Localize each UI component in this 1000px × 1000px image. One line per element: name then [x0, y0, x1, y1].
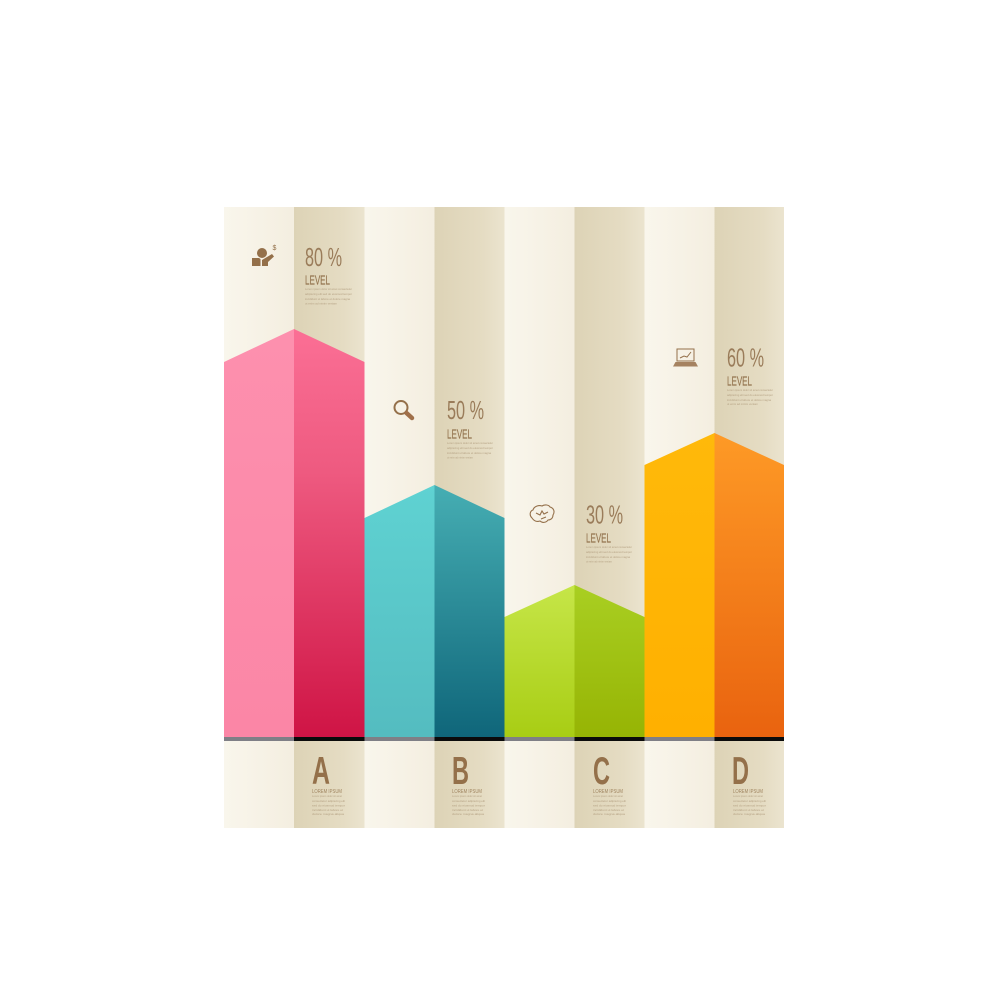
- label: 80% level: ut enim ad minim veniam: [305, 302, 338, 306]
- label: 60% level: adipiscing elit sed do eiusmod tempor: [727, 393, 773, 397]
- label: 50% level: Lorem ipsum dolor sit amet consectetur: [447, 441, 493, 445]
- caption C: dolore magna aliqua: [593, 812, 626, 816]
- caption A: LOREM IPSUM: [312, 789, 342, 795]
- caption B: [452, 750, 485, 816]
- label: 60% level: [727, 342, 773, 406]
- folded paper background: [224, 207, 784, 828]
- caption B: consectetur adipiscing elit: [452, 799, 485, 803]
- caption C: sed do eiusmod tempor: [593, 804, 626, 808]
- label: 30% level: incididunt ut labore et dolore magna: [586, 555, 630, 559]
- bar D: [644, 433, 784, 737]
- caption A: dolore magna aliqua: [312, 812, 345, 816]
- icon: laptop with chart: [673, 349, 698, 366]
- label: 60% level: ut enim ad minim veniam: [727, 402, 759, 406]
- label: 30% level: [586, 500, 632, 564]
- label: 50% level: incididunt ut labore et dolore magna: [447, 451, 491, 455]
- icon: brain: [530, 505, 554, 522]
- label: 50% level: ut enim ad minim veniam: [447, 456, 474, 460]
- bar A: [224, 329, 364, 737]
- bar C: [504, 585, 644, 737]
- caption D: LOREM IPSUM: [733, 789, 763, 795]
- caption C: C: [593, 750, 610, 793]
- baseline strip: [224, 737, 784, 741]
- caption A: sed do eiusmod tempor: [312, 804, 345, 808]
- caption A: A: [312, 750, 330, 793]
- caption A: incididunt ut labore et: [312, 808, 343, 812]
- caption B: sed do eiusmod tempor: [452, 804, 485, 808]
- label: 50% level: LEVEL: [447, 428, 472, 442]
- label: 80% level: [305, 242, 352, 306]
- label: 60% level: 60 %: [727, 342, 764, 372]
- caption D: dolore magna aliqua: [733, 812, 766, 816]
- caption B: dolore magna aliqua: [452, 812, 485, 816]
- caption B: LOREM IPSUM: [452, 789, 482, 795]
- label: 30% level: ut enim ad minim veniam: [586, 560, 613, 564]
- caption C: Lorem ipsum dolor sit amet: [593, 794, 623, 798]
- caption D: sed do eiusmod tempor: [733, 804, 766, 808]
- icon: businessman with dollar: $: [272, 245, 276, 252]
- caption C: incididunt ut labore et: [593, 808, 624, 812]
- label: 80% level: LEVEL: [305, 274, 330, 288]
- caption C: LOREM IPSUM: [593, 789, 623, 795]
- icon: businessman with dollar: [252, 245, 276, 266]
- label: 30% level: adipiscing elit sed do eiusmod tempor: [586, 550, 632, 554]
- label: 30% level: 30 %: [586, 500, 623, 530]
- icon: magnifying glass: [394, 401, 412, 418]
- caption D: [732, 750, 766, 816]
- caption D: Lorem ipsum dolor sit amet: [733, 794, 763, 798]
- caption C: [593, 750, 626, 816]
- label: 60% level: Lorem ipsum dolor sit amet consectetur: [727, 388, 773, 392]
- caption C: consectetur adipiscing elit: [593, 799, 626, 803]
- label: 50% level: adipiscing elit sed do eiusmod tempor: [447, 446, 493, 450]
- caption B: B: [452, 750, 469, 793]
- label: 60% level: LEVEL: [727, 374, 752, 388]
- label: 30% level: Lorem ipsum dolor sit amet consectetur: [586, 545, 632, 549]
- caption A: consectetur adipiscing elit: [312, 799, 345, 803]
- label: 80% level: incididunt ut labore et dolore magna: [305, 297, 350, 301]
- label: 60% level: incididunt ut labore et dolore magna: [727, 398, 771, 402]
- caption B: incididunt ut labore et: [452, 808, 483, 812]
- label: 80% level: Lorem ipsum dolor sit amet consectetur: [305, 287, 352, 291]
- label: 30% level: LEVEL: [586, 532, 611, 546]
- label: 50% level: 50 %: [447, 395, 484, 425]
- caption D: D: [732, 750, 749, 793]
- caption D: incididunt ut labore et: [733, 808, 764, 812]
- caption A: [312, 750, 345, 816]
- label: 50% level: [447, 395, 493, 460]
- bar B: [364, 485, 504, 737]
- label: 80% level: 80 %: [305, 242, 342, 272]
- caption B: Lorem ipsum dolor sit amet: [452, 794, 482, 798]
- label: 80% level: adipiscing elit sed do eiusmod tempor: [305, 292, 352, 296]
- caption D: consectetur adipiscing elit: [733, 799, 766, 803]
- caption A: Lorem ipsum dolor sit amet: [312, 794, 342, 798]
